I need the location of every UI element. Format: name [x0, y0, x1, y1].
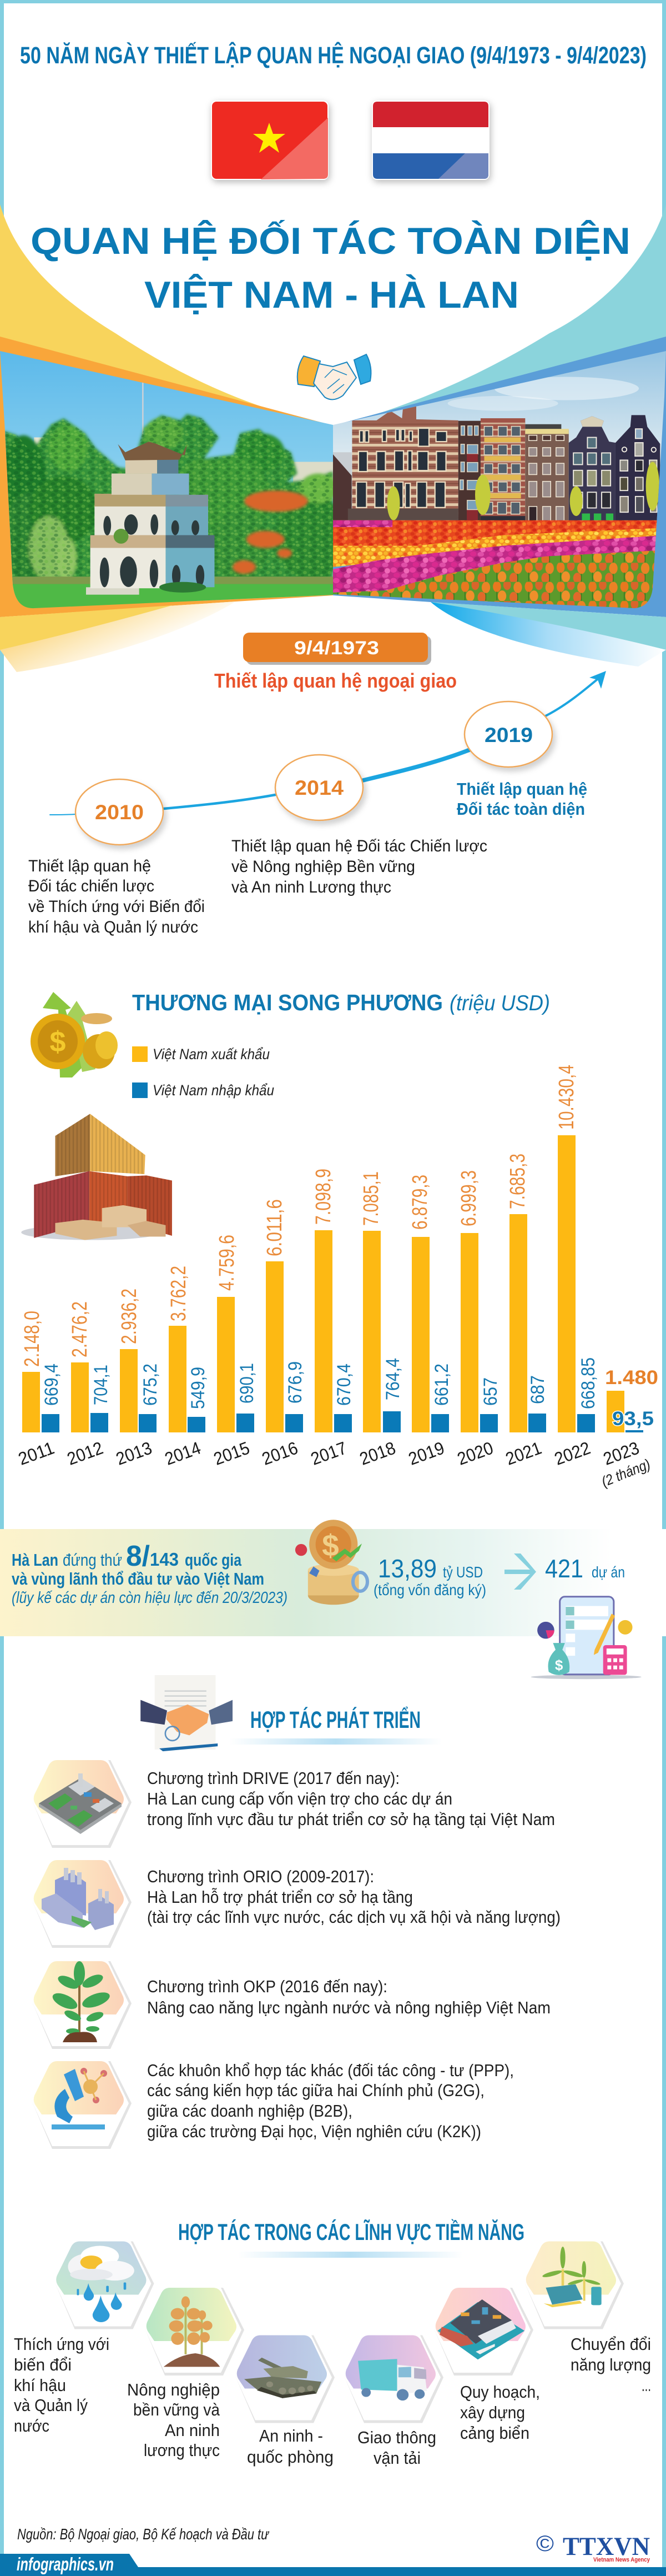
year axis labels: 2012 [64, 1437, 105, 1469]
text 2010: về Thích ứng với Biến đổi [28, 898, 205, 916]
text: other frameworks: giữa các trường Đại học, Viện nghiên cứu (K2K)) [147, 2122, 481, 2141]
value 2023 export: 1.480 [605, 1367, 658, 1389]
year axis labels: 2016 [259, 1437, 300, 1469]
panel: potential cooperation fields [14, 2219, 651, 2468]
text 2019: Đối tác toàn diện [457, 799, 585, 819]
text: climate: nước [14, 2416, 49, 2435]
text: climate: và Quản lý [14, 2395, 88, 2415]
heading: development cooperation: HỢP TÁC PHÁT TRIỂN [250, 1706, 421, 1733]
text: climate: biến đổi [14, 2355, 72, 2374]
icon: wind and solar [525, 2242, 624, 2329]
import values: 549,9 [188, 1367, 209, 1409]
icon: gold coins with arrows [31, 992, 118, 1077]
orange surround of left photo [0, 337, 333, 617]
logo: TTXVN [536, 2532, 650, 2563]
export values [21, 1065, 578, 1367]
icon: wheat [145, 2288, 244, 2375]
panel: bilateral trade [16, 990, 658, 1490]
heading: bilateral trade: (triệu USD) [450, 991, 550, 1015]
legend: Việt Nam xuất khẩu [153, 1046, 270, 1063]
text: DRIVE: Chương trình DRIVE (2017 đến nay): [147, 1768, 400, 1788]
export values: 6.999,3 [457, 1170, 481, 1226]
text: ORIO: Hà Lan hỗ trợ phát triển cơ sở hạ tầng [147, 1887, 413, 1907]
year axis labels: 2014 [162, 1437, 203, 1469]
export values: 6.011,6 [263, 1199, 286, 1256]
investment rank text: quốc gia [185, 1550, 242, 1570]
panel: investment [0, 1520, 666, 1679]
text: OKP: Chương trình OKP (2016 đến nay): [147, 1977, 387, 1996]
panel: development cooperation [33, 1675, 561, 2149]
text: seaports: cảng biển [460, 2423, 529, 2443]
text: agriculture: lương thực [144, 2440, 220, 2460]
year axis labels: 2022 [552, 1437, 593, 1469]
import values: 669,4 [41, 1364, 62, 1406]
import values: 764,4 [382, 1358, 403, 1400]
photo: Hanoi Turtle Tower [0, 346, 349, 612]
investment rank text: 8/ [126, 1540, 150, 1572]
year axis labels: (2 tháng) [599, 1456, 653, 1490]
item: DRIVE [33, 1760, 555, 1848]
text: DRIVE [147, 1768, 555, 1829]
investment band [0, 1529, 666, 1636]
stat: projects [545, 1554, 625, 1583]
investment rank text: 143 [150, 1549, 179, 1570]
icon: port [435, 2288, 533, 2375]
text: climate [14, 2334, 109, 2435]
legend [132, 1046, 274, 1099]
date badge 1973: 9/4/1973 [294, 638, 379, 659]
import values: 690,1 [236, 1363, 258, 1404]
text: seaports [460, 2382, 540, 2443]
text: other frameworks: các sáng kiến hợp tác giữa hai Chính phủ (G2G), [147, 2081, 485, 2100]
export values: 7.085,1 [360, 1171, 383, 1226]
text: OKP: Nâng cao năng lực ngành nước và nông nghiệp Việt Nam [147, 1998, 551, 2017]
panel: header [0, 42, 666, 672]
yellow wing [0, 204, 333, 427]
milestone 2014: 2014 [295, 776, 344, 799]
icon: truck [345, 2335, 443, 2423]
text: ORIO: (tài trợ các lĩnh vực nước, các dịch vụ xã hội và năng lượng) [147, 1907, 561, 1927]
import values: 676,9 [285, 1361, 306, 1404]
bar chart: exports and imports [16, 1065, 658, 1490]
text 2010 [28, 857, 205, 936]
logo: TTXVN: Vietnam News Agency [593, 2557, 650, 2563]
footer: site bar: infographics.vn [17, 2554, 114, 2574]
icon: signed agreement handshake [140, 1675, 233, 1751]
item: climate [14, 2242, 154, 2435]
text: other frameworks: giữa các doanh nghiệp (B2B), [147, 2101, 352, 2121]
text 2014: về Nông nghiệp Bền vững [231, 858, 415, 876]
text 2019 [457, 779, 587, 819]
icon: seedling [33, 1961, 132, 2049]
text: other frameworks: Các khuôn khổ hợp tác khác (đối tác công - tư (PPP), [147, 2061, 514, 2080]
milestone 2019 [465, 701, 552, 767]
text: agriculture: Nông nghiệp [127, 2380, 220, 2399]
milestone caption 1973: Thiết lập quan hệ ngoại giao [214, 669, 457, 692]
export values: 6.879,3 [408, 1175, 432, 1230]
item: seaports [435, 2288, 540, 2443]
icon: clipboard with money [531, 1597, 642, 1679]
year axis labels: 2017 [308, 1437, 349, 1469]
year axis labels: 2018 [357, 1437, 398, 1469]
year axis labels: 2023 [601, 1437, 642, 1469]
stat: total capital: 13,89 [378, 1554, 437, 1583]
item: transport [345, 2335, 443, 2468]
text: climate: khí hậu [14, 2375, 66, 2395]
text 2014: và An ninh Lương thực [231, 878, 391, 896]
import values: 687 [527, 1375, 548, 1404]
text 2019: Thiết lập quan hệ [457, 779, 587, 799]
teal wing [333, 204, 666, 427]
logo: TTXVN: TTXVN [563, 2532, 650, 2561]
text: agriculture [127, 2380, 220, 2460]
text: energy: ... [642, 2375, 651, 2395]
milestone 2010: 2010 [95, 801, 144, 824]
import values: 675,2 [140, 1364, 161, 1406]
icon: coin stack [295, 1520, 367, 1605]
icon: tank [236, 2335, 335, 2423]
investment rank text: (lũy kế các dự án còn hiệu lực đến 20/3/2023) [12, 1589, 287, 1607]
text: energy [571, 2334, 651, 2395]
text: defense [247, 2426, 334, 2467]
text: DRIVE: Hà Lan cung cấp vốn viện trợ cho các dự án [147, 1789, 452, 1808]
icon: rain cloud [56, 2242, 154, 2329]
icon: factory [33, 1860, 132, 1948]
text: climate: Thích ứng với [14, 2334, 109, 2354]
export values: 3.762,2 [167, 1266, 190, 1321]
export values: 2.148,0 [21, 1311, 44, 1367]
stat: total capital [374, 1554, 486, 1598]
stat: projects: 421 [545, 1554, 583, 1583]
import bars [42, 1411, 643, 1432]
source note: Nguồn: Bộ Ngoại giao, Bộ Kế hoạch và Đầu tư [17, 2525, 270, 2543]
stat: projects: dự án [592, 1563, 625, 1581]
export values: 2.476,2 [68, 1301, 92, 1357]
investment rank text [12, 1540, 287, 1607]
export values: 7.685,3 [506, 1154, 529, 1209]
investment rank text: và vùng lãnh thổ đầu tư vào Việt Nam [12, 1569, 264, 1588]
item: ORIO [33, 1860, 561, 1948]
arrow: timeline curve [50, 671, 606, 815]
year axis labels: 2015 [211, 1437, 252, 1469]
item: other frameworks [33, 2061, 514, 2149]
text: OKP [147, 1977, 551, 2017]
yellow lower wedge [0, 605, 172, 650]
item: defense [236, 2335, 335, 2467]
item: agriculture [127, 2288, 244, 2460]
flag: Netherlands [372, 101, 489, 179]
yellow lower fade [0, 602, 236, 672]
milestone 2014 [275, 755, 363, 820]
year axis labels: 2011 [16, 1437, 57, 1469]
title: main heading: VIỆT NAM - HÀ LAN [144, 273, 519, 316]
import values: 670,4 [334, 1364, 355, 1406]
text: ORIO: Chương trình ORIO (2009-2017): [147, 1867, 374, 1886]
text: defense: An ninh - [259, 2426, 323, 2445]
icon: handshake [297, 354, 371, 399]
text: agriculture: bền vững và [133, 2400, 220, 2419]
icon: shipping containers [21, 1114, 172, 1240]
value 2023 import: 93,5 [612, 1408, 654, 1430]
milestone 2010 [75, 779, 163, 845]
text: DRIVE: trong lĩnh vực đầu tư phát triển cơ sở hạ tầng tại Việt Nam [147, 1810, 555, 1829]
title: main heading [31, 219, 630, 316]
stat: total capital: (tổng vốn đăng ký) [374, 1581, 486, 1598]
blue surround of right photo [333, 337, 666, 617]
item: energy [525, 2242, 651, 2395]
legend: Việt Nam nhập khẩu [153, 1082, 274, 1099]
import values [41, 1357, 599, 1409]
year axis labels [16, 1437, 653, 1490]
panel: timeline [28, 633, 606, 936]
icon: gold coins with arrows: $ [50, 1026, 66, 1058]
title: main heading: QUAN HỆ ĐỐI TÁC TOÀN DIỆN [31, 219, 630, 262]
import values: 657 [480, 1377, 501, 1406]
text 2014: Thiết lập quan hệ Đối tác Chiến lược [231, 837, 487, 855]
import values: 668,85 [578, 1357, 599, 1409]
cyan lower fade [431, 602, 666, 666]
heading underline [238, 2252, 463, 2258]
text: defense: quốc phòng [247, 2447, 334, 2467]
stat: total capital: tỷ USD [443, 1563, 483, 1581]
milestone 2019: 2019 [485, 724, 533, 746]
text: agriculture: An ninh [165, 2420, 220, 2440]
text: seaports: xây dựng [460, 2403, 525, 2422]
icon: microscope [33, 2061, 132, 2149]
year axis labels: 2020 [455, 1437, 496, 1469]
text: ORIO [147, 1867, 561, 1927]
footer: site bar [0, 2554, 666, 2576]
item: OKP [33, 1961, 551, 2049]
text: energy: Chuyển đổi [571, 2334, 651, 2354]
teal lower wedge [431, 602, 666, 650]
text: transport [357, 2428, 436, 2468]
date badge 1973 [243, 633, 431, 665]
export bars [22, 1135, 624, 1432]
text: other frameworks [147, 2061, 514, 2141]
text 2014 [231, 837, 487, 896]
photo: Amsterdam houses and tulips [333, 346, 666, 609]
investment rank text: Hà Lan [12, 1550, 58, 1570]
export values: 7.098,9 [312, 1169, 335, 1225]
year axis labels: 2019 [406, 1437, 447, 1469]
investment rank text: đứng thứ [63, 1550, 122, 1570]
export values: 2.936,2 [118, 1289, 141, 1344]
year axis labels: 2021 [503, 1437, 544, 1469]
logo: TTXVN: © [536, 2532, 554, 2556]
import values: 704,1 [90, 1365, 112, 1405]
year axis labels: 2013 [113, 1437, 154, 1469]
export values: 10.430,4 [555, 1065, 578, 1130]
import values: 661,2 [431, 1364, 452, 1406]
text: energy: năng lượng [571, 2355, 651, 2374]
text 2010: Thiết lập quan hệ [28, 857, 151, 875]
text 2010: khí hậu và Quản lý nước [28, 918, 198, 936]
text: transport: Giao thông [357, 2428, 436, 2447]
export values: 4.759,6 [215, 1235, 239, 1291]
icon: city block [33, 1760, 132, 1848]
heading underline [229, 1738, 442, 1745]
text: transport: vận tải [374, 2448, 421, 2468]
arrow: capital to projects [504, 1553, 536, 1590]
flag: Vietnam [211, 101, 328, 179]
text: seaports: Quy hoạch, [460, 2382, 540, 2402]
heading: bilateral trade: THƯƠNG MẠI SONG PHƯƠNG [132, 990, 443, 1015]
icon: clipboard with money: $ [555, 1657, 563, 1673]
text 2010: Đối tác chiến lược [28, 877, 154, 895]
icon: coin stack: $ [322, 1528, 339, 1562]
